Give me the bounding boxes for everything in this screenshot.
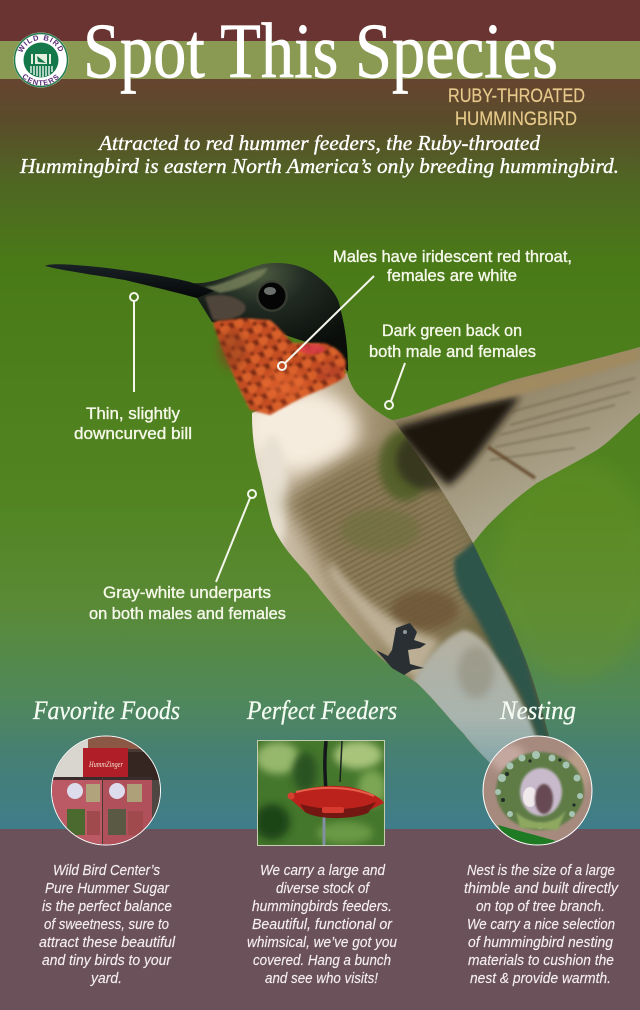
text block: nesting: Nest is the size of a large (467, 862, 615, 879)
text block: perfect feeders: and see who visits! (265, 970, 379, 987)
text block: perfect feeders: whimsical, we’ve got you (247, 934, 398, 951)
text block: perfect feeders: We carry a large and (260, 862, 386, 879)
text block: perfect feeders: covered. Hang a bunch (253, 952, 391, 969)
callout: throat (278, 248, 572, 370)
text block: nesting: of hummingbird nesting (468, 934, 614, 951)
logo: Wild Bird Centers (14, 32, 68, 88)
photo: red hummingbird feeder (254, 740, 386, 846)
text block: favorite foods (39, 862, 176, 987)
eye (256, 280, 288, 312)
callout: throat: Males have iridescent red throat, (333, 248, 572, 266)
intro text (19, 131, 619, 178)
callout: underparts: on both males and females (89, 605, 286, 623)
head (190, 263, 348, 372)
text block: perfect feeders (247, 862, 398, 987)
callout: bill (74, 293, 192, 443)
text block: perfect feeders: hummingbirds feeders. (252, 898, 392, 915)
heading: nesting: Nesting (499, 696, 576, 725)
title: Spot This Species (83, 7, 558, 94)
heading: perfect feeders: Perfect Feeders (246, 696, 397, 725)
body and tail (252, 373, 549, 763)
photo: hummer sugar products (50, 735, 164, 847)
intro text: Attracted to red hummer feeders, the Ruby-throated (97, 131, 541, 155)
text block: perfect feeders: Beautiful, functional or (252, 916, 393, 933)
text block: favorite foods: and tiny birds to your (42, 952, 172, 969)
pale belly and undertail (412, 628, 538, 763)
logo: Wild Bird Centers: CENTERS (22, 74, 59, 86)
text block: perfect feeders: diverse stock of (276, 880, 371, 897)
text block: favorite foods: of sweetness, sure to (44, 916, 169, 933)
callout: bill: Thin, slightly (86, 405, 181, 423)
bill (45, 264, 214, 298)
callout: underparts (89, 490, 286, 623)
text block: nesting: on top of tree branch. (476, 898, 605, 915)
logo: Wild Bird Centers: WILD BIRD (17, 35, 63, 52)
text block: nesting: thimble and built directly (464, 880, 619, 897)
bottom panel (0, 829, 640, 1010)
text block: favorite foods: Pure Hummer Sugar (45, 880, 170, 897)
dark green flank stripe (454, 535, 552, 748)
hummingbird illustration (45, 263, 640, 790)
text block: nesting: nest & provide warmth. (470, 970, 611, 987)
ruby throat (213, 318, 346, 415)
callout: bill: downcurved bill (74, 425, 192, 443)
subtitle: species name: HUMMINGBIRD (455, 109, 577, 130)
wing (393, 347, 640, 543)
text block: favorite foods: attract these beautiful (39, 934, 176, 951)
text block: nesting: materials to cushion the (468, 952, 614, 969)
callout: back: Dark green back on (382, 322, 522, 340)
intro text: Hummingbird is eastern North America’s only breeding hummingbird. (19, 154, 619, 178)
text block: nesting (464, 862, 619, 987)
photo: hummer sugar products: HummZinger (88, 760, 124, 769)
photo: nest (482, 735, 594, 850)
subtitle: species name (448, 86, 585, 130)
text block: favorite foods: Wild Bird Center’s (53, 862, 160, 879)
text block: favorite foods: is the perfect balance (42, 898, 172, 915)
callout: back: both male and females (369, 343, 536, 361)
text block: nesting: We carry a nice selection (467, 916, 615, 933)
foot (376, 623, 426, 675)
heading: favorite foods: Favorite Foods (32, 696, 180, 725)
callout: back (369, 322, 536, 409)
text block: favorite foods: yard. (90, 970, 122, 987)
callout: throat: females are white (387, 267, 517, 285)
subtitle: species name: RUBY-THROATED (448, 86, 585, 107)
callout: underparts: Gray-white underparts (103, 584, 271, 602)
